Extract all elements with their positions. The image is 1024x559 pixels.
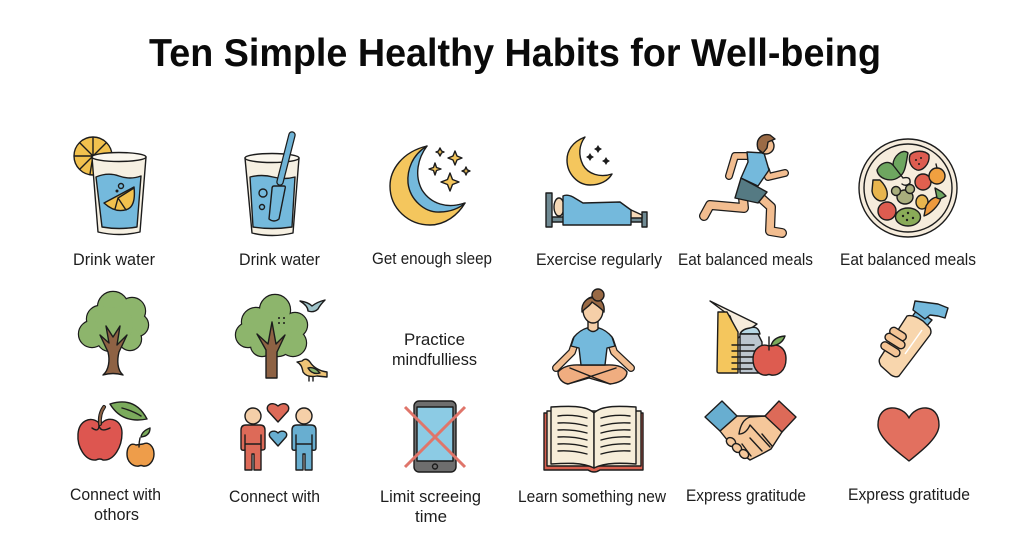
label: practice mindfulness: Practice — [404, 331, 465, 349]
icon: moon and person sleeping in bed — [546, 137, 647, 227]
label: express gratitude 1: Express gratitude — [686, 487, 806, 505]
label: practice mindfulness — [392, 331, 477, 369]
icon: glass of water with lemon — [74, 137, 146, 234]
label: connect with others 1: Connect with — [70, 486, 161, 504]
icon: plate of healthy food — [859, 139, 957, 237]
label: practice mindfulness: mindfulliess — [392, 351, 477, 369]
icon: glass of water with straw — [245, 135, 299, 236]
icon: heart — [878, 408, 939, 461]
title: Ten Simple Healthy Habits for Well-being — [149, 32, 881, 75]
icon: handshake — [705, 401, 796, 460]
icon: crescent moon and stars — [390, 146, 470, 225]
label: exercise regularly: Exercise regularly — [536, 251, 663, 269]
label: drink water 1: Drink water — [73, 251, 155, 269]
icon: apples and leaf — [78, 402, 154, 466]
icon: tree with birds — [236, 295, 327, 381]
label: limit screen time: time — [415, 508, 447, 526]
label: learn something new: Learn something new — [518, 488, 666, 506]
label: limit screen time: Limit screeing — [380, 488, 481, 506]
label: limit screen time — [380, 488, 481, 526]
icon: hand holding spray bottle — [879, 301, 948, 377]
icon: tree — [79, 292, 148, 375]
label: eat balanced meals 1: Eat balanced meals — [678, 251, 813, 269]
icon: open book — [544, 406, 643, 472]
label: connect with others 2: Connect with — [229, 488, 320, 506]
label: drink water 2: Drink water — [239, 251, 320, 269]
label: eat balanced meals 2: Eat balanced meals — [840, 251, 976, 269]
label: express gratitude 2: Express gratitude — [848, 486, 970, 504]
icon: runner — [704, 135, 785, 233]
icon: person meditating — [556, 289, 631, 384]
label: get enough sleep: Get enough sleep — [372, 250, 492, 268]
label: connect with others 1: othors — [94, 506, 139, 524]
icon: two people with hearts — [241, 404, 316, 470]
icon: crossed-out smartphone — [405, 401, 465, 472]
label: connect with others 1 — [70, 486, 161, 524]
icon: milk carton and apple — [710, 301, 786, 375]
